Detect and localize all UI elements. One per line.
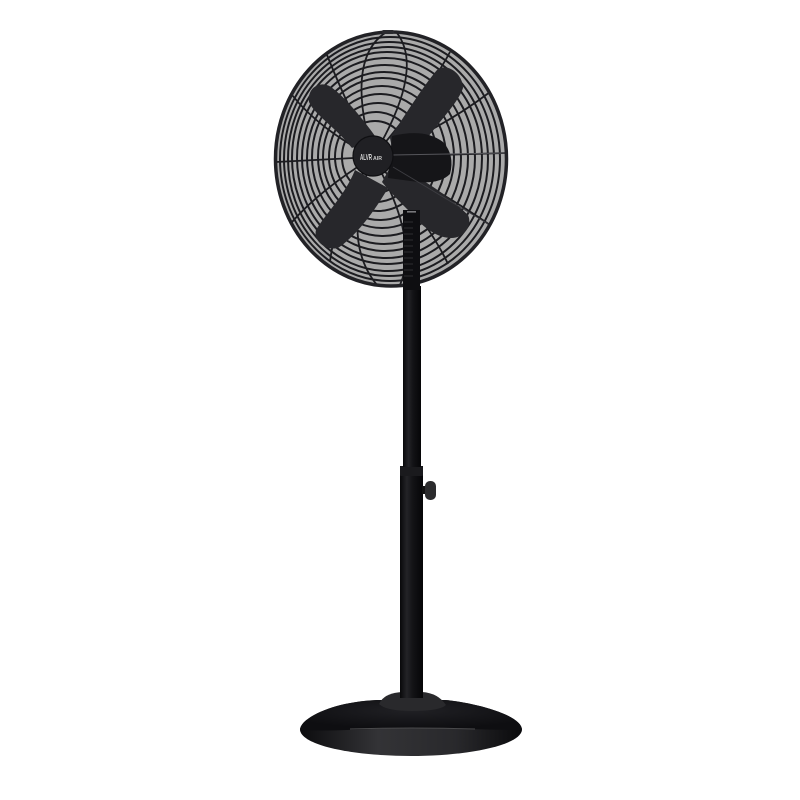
concentric guard wires (280, 37, 500, 281)
height adjustment knob (422, 481, 436, 500)
lower pole (400, 466, 423, 698)
radial guard wires (276, 33, 506, 285)
guard background (276, 32, 506, 286)
fan head (276, 30, 506, 286)
motor housing (388, 133, 505, 225)
tilt neck (403, 210, 420, 290)
base collar (379, 692, 446, 711)
hub badge: AIR (373, 156, 382, 162)
upper pole (403, 286, 421, 467)
logo: ALVR (360, 152, 372, 162)
guard rim (276, 32, 506, 286)
base (300, 692, 522, 756)
hub badge (353, 136, 393, 176)
fan blades (309, 67, 469, 249)
pole joint (400, 466, 423, 476)
top clip (382, 30, 394, 34)
